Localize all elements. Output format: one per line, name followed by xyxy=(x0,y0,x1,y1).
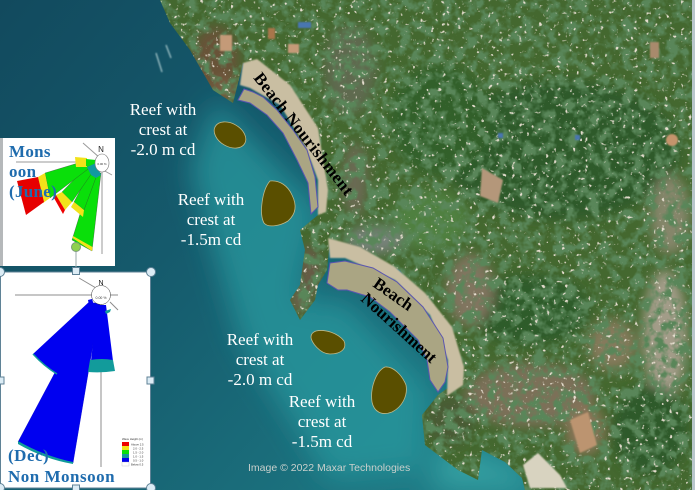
label: reef 4: crest at xyxy=(298,412,347,431)
label: beach nourishment north: Beach Nourishment xyxy=(250,69,358,199)
label: beach nourishment south, line 2: Nourishment xyxy=(357,289,441,367)
panel: monsoon wave rose xyxy=(0,138,115,266)
legend: wave height: Wave Height (m) xyxy=(122,437,143,441)
sand beaches xyxy=(240,59,567,488)
beach nourishment area 2 xyxy=(327,261,448,392)
sector: south xyxy=(72,172,101,251)
legend: wave height: 0.5 - 1.0 xyxy=(133,458,144,462)
calm value: 0.00 % xyxy=(97,162,107,166)
label: reef 1: -2.0 m cd xyxy=(131,140,196,159)
label: reef 2: crest at xyxy=(187,210,236,229)
sector: west-southwest xyxy=(17,160,92,215)
sector: south-southwest xyxy=(71,168,98,217)
reef 1 xyxy=(210,117,250,153)
wake lines of boats xyxy=(156,45,171,72)
label: reef 3: -2.0 m cd xyxy=(228,370,293,389)
legend: wave height xyxy=(122,437,144,466)
sector: southwest xyxy=(33,301,96,374)
sector: south-southwest long xyxy=(18,303,100,464)
selection frame and handles xyxy=(0,242,156,490)
label: beach nourishment south, line 1: Beach xyxy=(370,274,417,315)
calm circle xyxy=(95,154,109,172)
imagery credit: Image © 2022 Maxar Technologies xyxy=(248,462,410,474)
reef 2 xyxy=(262,181,295,226)
reef 4 xyxy=(372,367,406,414)
label: reef 1: Reef with xyxy=(130,100,197,119)
beach nourishment area 1 xyxy=(238,89,318,214)
legend: wave height: 1.5 - 2.0 xyxy=(133,450,144,454)
north mark: N xyxy=(98,280,104,287)
heading: monsoon: oon xyxy=(9,162,37,181)
legend: wave height: Below 0.5 xyxy=(131,462,144,466)
label: reef 4: Reef with xyxy=(289,392,356,411)
vegetation and built-up patches xyxy=(191,25,690,475)
heading: monsoon: (June) xyxy=(9,182,57,201)
label: reef 3: Reef with xyxy=(227,330,294,349)
heading: monsoon: Mons xyxy=(9,142,51,161)
legend: wave height: Above 2.5 xyxy=(131,442,144,446)
sector: southwest xyxy=(54,163,94,214)
label: reef 2: -1.5m cd xyxy=(181,230,242,249)
calm value: 0.00 % xyxy=(96,296,106,300)
reef 3 xyxy=(311,330,345,354)
calm core xyxy=(87,163,101,178)
label: reef 1: crest at xyxy=(139,120,188,139)
north mark: N xyxy=(98,145,104,154)
land xyxy=(160,0,692,490)
heading: non monsoon: (Dec) xyxy=(8,446,49,465)
sector: south xyxy=(88,305,115,372)
buildings and clearings xyxy=(220,28,678,453)
panel: non monsoon wave rose xyxy=(0,272,150,488)
calm circle xyxy=(92,286,110,304)
legend: wave height: 1.0 - 1.5 xyxy=(133,454,144,458)
heading: non monsoon: Non Monsoon xyxy=(8,467,115,486)
legend: wave height: 2.0 - 2.5 xyxy=(133,446,144,450)
image edge strip xyxy=(692,0,695,490)
label: reef 4: -1.5m cd xyxy=(292,432,353,451)
sector: west xyxy=(75,157,87,167)
shallow water near the coast xyxy=(190,100,530,490)
label: reef 2: Reef with xyxy=(178,190,245,209)
label: reef 3: crest at xyxy=(236,350,285,369)
